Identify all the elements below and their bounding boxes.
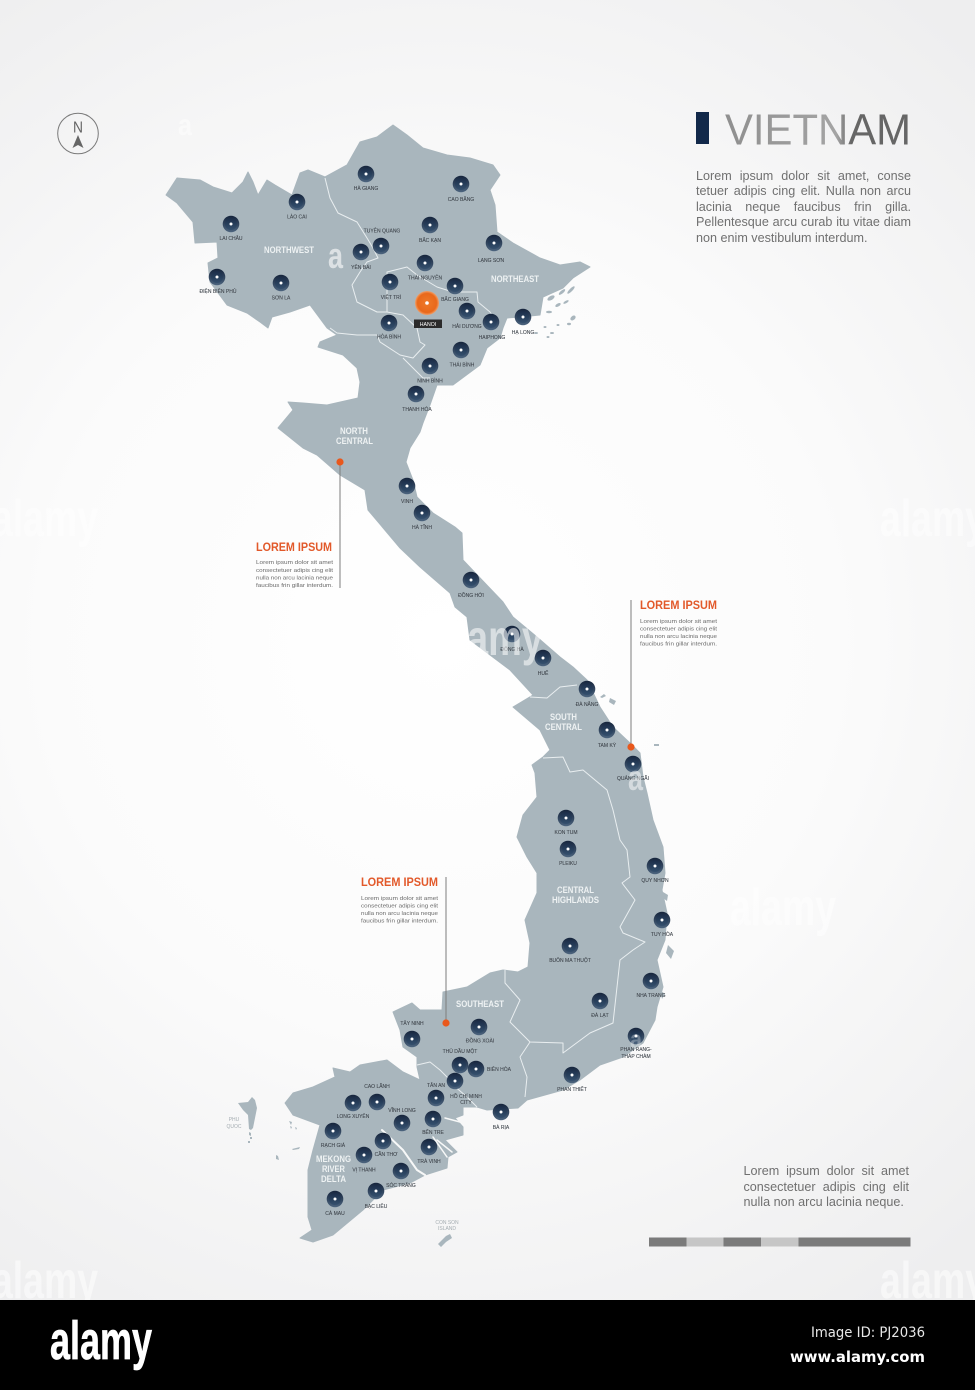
label: Phu Quoc: QUOC bbox=[226, 1124, 242, 1130]
rivers: Mekong mouths bbox=[382, 1118, 460, 1175]
marker: Hanoi capital: HANOI bbox=[420, 322, 436, 328]
marker: Bac Lieu bbox=[365, 1183, 388, 1210]
text block: intro paragraph: Lorem ipsum dolor sit amet, conse bbox=[696, 169, 911, 183]
marker: Tuy Hoa bbox=[651, 912, 674, 938]
callout: South Central: faucibus frin gillar interdum. bbox=[640, 642, 717, 648]
marker: Can Tho: CẦN THƠ bbox=[375, 1151, 398, 1158]
callout: North Central: Lorem ipsum dolor sit amet bbox=[256, 560, 333, 566]
marker: Phan Thiet: PHAN THIẾT bbox=[557, 1086, 587, 1093]
islands: Ha Long bay bbox=[534, 285, 577, 338]
callout: South Central: nulla non arcu lacinia neque bbox=[640, 634, 717, 640]
callout: North Central: LOREM IPSUM bbox=[256, 542, 332, 554]
marker: Bac Lieu: BẠC LIÊU bbox=[365, 1202, 388, 1210]
watermark: alamy stamps: a bbox=[328, 235, 344, 276]
marker: Dong Hoi bbox=[458, 572, 484, 599]
map: Vietnam bbox=[166, 125, 674, 1247]
marker: Rach Gia: RẠCH GIÁ bbox=[321, 1142, 346, 1149]
marker: Bac Kan: BẮC KẠN bbox=[419, 236, 441, 244]
marker: Phan Thiet bbox=[557, 1067, 587, 1093]
islands: central coast bbox=[538, 665, 674, 999]
island: Con Son bbox=[438, 1234, 452, 1247]
marker: Ha Long: HẠ LONG bbox=[512, 330, 534, 336]
marker: Pleiku: PLEIKU bbox=[559, 861, 577, 867]
text block: intro paragraph: non enim vestibulum interdum. bbox=[696, 231, 868, 245]
marker: Yen Bai bbox=[351, 244, 371, 271]
marker: Buon Ma Thuot bbox=[549, 938, 591, 964]
marker: Cao Lanh bbox=[364, 1083, 390, 1110]
callout: South Central: consectetuer adipis cing elit bbox=[640, 626, 717, 632]
marker: Cao Bang bbox=[448, 176, 474, 203]
marker: Thu Dau Mot: THỦ DẦU MỘT bbox=[443, 1048, 477, 1055]
region label: South Central: SOUTH bbox=[550, 712, 577, 722]
marker: Dong Ha: ĐÔNG HÀ bbox=[500, 646, 524, 653]
marker: Ninh Binh bbox=[417, 358, 443, 384]
label: Phu Quoc bbox=[226, 1117, 242, 1130]
marker: Bac Giang: BẮC GIANG bbox=[441, 295, 469, 303]
text block: lower note bbox=[744, 1164, 909, 1209]
marker: Tuyen Quang bbox=[364, 226, 400, 254]
callout: South Central: Lorem ipsum dolor sit amet bbox=[640, 619, 717, 625]
title: Vietnam: VIETNAM bbox=[725, 106, 911, 154]
marker: Soc Trang: SÓC TRĂNG bbox=[386, 1182, 416, 1189]
marker: Tuyen Quang: TUYÊN QUANG bbox=[364, 226, 400, 234]
marker: Ninh Binh: NINH BÌNH bbox=[417, 378, 443, 384]
marker: Ca Mau: CÀ MAU bbox=[325, 1210, 345, 1217]
text block: lower note: Lorem ipsum dolor sit amet bbox=[744, 1164, 909, 1178]
marker: Rach Gia bbox=[321, 1123, 346, 1149]
marker: Ha Tinh bbox=[412, 505, 432, 531]
marker: Buon Ma Thuot: BUÔN MA THUỘT bbox=[549, 957, 591, 964]
watermark: alamy stamps: a bbox=[628, 757, 644, 798]
marker: Dong Xoai bbox=[466, 1019, 494, 1044]
marker: Vinh Long: VĨNH LONG bbox=[388, 1107, 416, 1114]
marker: Tra Vinh: TRÀ VINH bbox=[417, 1158, 441, 1165]
region label: Southeast: SOUTHEAST bbox=[456, 999, 505, 1009]
marker: Da Nang: ĐÀ NẴNG bbox=[576, 701, 599, 708]
region label: South Central bbox=[545, 712, 583, 732]
region label: Mekong River Delta: MEKONG bbox=[316, 1154, 351, 1164]
callout: Southeast: consectetuer adipis cing elit bbox=[361, 904, 438, 910]
text block: intro paragraph bbox=[696, 169, 911, 245]
island: Phu Quoc bbox=[238, 1097, 257, 1130]
footer: alamy bar: Image ID: PJ2036 bbox=[811, 1325, 925, 1341]
region label: Mekong River Delta: DELTA bbox=[321, 1174, 347, 1184]
marker: Ben Tre bbox=[422, 1111, 444, 1136]
marker: Ca Mau bbox=[325, 1191, 345, 1217]
callout: Southeast: nulla non arcu lacinia neque bbox=[361, 911, 438, 917]
marker: Ba Ria bbox=[493, 1104, 510, 1131]
marker: Dong Xoai: ĐỒNG XOÀI bbox=[466, 1038, 494, 1044]
marker: Ba Ria: BÀ RỊA bbox=[493, 1124, 510, 1131]
label: Phu Quoc: PHU bbox=[229, 1117, 240, 1123]
region label: North Central: CENTRAL bbox=[336, 436, 374, 446]
marker: Tam Ky bbox=[598, 722, 617, 749]
text block: intro paragraph: Pellentesque arcu curab itu vitae diam bbox=[696, 215, 911, 229]
marker: Phan Rang-Thap Cham: PHAN RANG- bbox=[620, 1047, 652, 1053]
marker: Vinh bbox=[399, 478, 415, 505]
marker: Ha Giang bbox=[354, 166, 378, 192]
marker: Tay Ninh: TÂY NINH bbox=[400, 1020, 424, 1027]
callout: Southeast: LOREM IPSUM bbox=[361, 877, 438, 889]
marker: Vi Thanh bbox=[352, 1147, 376, 1174]
marker: Tay Ninh bbox=[400, 1020, 424, 1047]
marker: Quy Nhon: QUY NHƠN bbox=[641, 878, 669, 884]
marker: Son La bbox=[272, 275, 291, 302]
region label: Mekong River Delta bbox=[316, 1154, 351, 1184]
marker: Thai Nguyen: THÁI NGUYÊN bbox=[408, 274, 442, 282]
marker: Da Nang bbox=[576, 681, 599, 708]
marker: Pleiku bbox=[559, 841, 577, 867]
region label: Central Highlands: CENTRAL bbox=[557, 885, 595, 895]
label: Con Son Island: ISLAND bbox=[438, 1226, 456, 1232]
callout: South Central: LOREM IPSUM bbox=[640, 600, 717, 612]
scale bar bbox=[649, 1238, 910, 1246]
label: Con Son Island bbox=[435, 1220, 459, 1232]
marker: Lang Son bbox=[478, 235, 505, 264]
regional borders bbox=[325, 178, 645, 1107]
marker: Quy Nhon bbox=[641, 858, 669, 884]
marker: Ha Tinh: HÀ TĨNH bbox=[412, 524, 432, 531]
callout: North Central bbox=[256, 458, 344, 589]
marker: Bac Giang bbox=[441, 278, 469, 303]
text block: lower note: consectetuer adipis cing elit bbox=[744, 1180, 909, 1194]
region label: Northeast: NORTHEAST bbox=[491, 274, 540, 284]
region label: North Central bbox=[336, 426, 374, 446]
marker: Son La: SƠN LA bbox=[272, 296, 291, 302]
callout: Southeast: Lorem ipsum dolor sit amet bbox=[361, 896, 438, 902]
marker: Lao Cai: LÀO CAI bbox=[287, 214, 307, 220]
text block: lower note: nulla non arcu lacinia neque. bbox=[744, 1195, 904, 1209]
marker: Dong Ha bbox=[500, 626, 524, 653]
marker: Da Lat bbox=[591, 993, 609, 1019]
marker: Tan An bbox=[427, 1073, 463, 1089]
marker: Thai Binh: THÁI BÌNH bbox=[450, 362, 475, 368]
marker: Quang Ngai bbox=[617, 756, 649, 782]
compass: north arrow: N bbox=[73, 120, 83, 136]
marker: Kon Tum: KON TUM bbox=[555, 830, 577, 836]
region label: Central Highlands bbox=[552, 885, 599, 905]
footer: alamy bar: alamy bbox=[50, 1311, 152, 1371]
callout: Southeast bbox=[361, 877, 450, 1027]
marker: Dien Bien Phu bbox=[200, 269, 237, 295]
marker: Thu Dau Mot bbox=[443, 1048, 477, 1073]
landmass bbox=[166, 125, 667, 1242]
marker: Tuy Hoa: TUY HÒA bbox=[651, 931, 674, 938]
marker: Vinh: VINH bbox=[401, 499, 413, 505]
marker: Phan Rang-Thap Cham bbox=[620, 1028, 652, 1060]
marker: Long Xuyen bbox=[337, 1095, 370, 1120]
city markers bbox=[200, 166, 674, 1217]
marker: Vinh Long bbox=[388, 1107, 416, 1131]
text block: intro paragraph: lacinia neque faucibus frin gilla. bbox=[696, 200, 911, 214]
marker: Bac Kan bbox=[419, 217, 441, 244]
marker: Can Tho bbox=[375, 1133, 398, 1158]
footer: alamy bar bbox=[0, 1300, 975, 1390]
callout: North Central: consectetuer adipis cing elit bbox=[256, 568, 333, 574]
label: Con Son Island: CON SON bbox=[435, 1220, 459, 1226]
marker: Ben Tre: BẾN TRE bbox=[422, 1129, 444, 1136]
marker: Cao Bang: CAO BẰNG bbox=[448, 195, 474, 203]
marker: Ho Chi Minh City: HỒ CHÍ MINH bbox=[450, 1093, 482, 1100]
marker: Dien Bien Phu: ĐIỆN BIÊN PHỦ bbox=[200, 287, 237, 295]
marker: Haiphong bbox=[479, 314, 505, 341]
marker: Nha Trang bbox=[636, 973, 666, 999]
watermark: alamy stamps: alamy bbox=[730, 879, 836, 937]
region label: Central Highlands: HIGHLANDS bbox=[552, 895, 599, 905]
marker: Kon Tum bbox=[555, 810, 577, 836]
marker: Bien Hoa: BIÊN HÒA bbox=[487, 1065, 512, 1073]
marker: Phan Rang-Thap Cham: THÁP CHÀM bbox=[621, 1053, 651, 1060]
marker: Hue bbox=[535, 650, 551, 677]
region label: Mekong River Delta: RIVER bbox=[322, 1164, 346, 1174]
marker: Lai Chau: LAI CHÂU bbox=[219, 235, 243, 242]
marker: Tan An: TÂN AN bbox=[427, 1082, 445, 1089]
marker: Ha Giang: HÀ GIANG bbox=[354, 185, 378, 192]
marker: Hoa Binh bbox=[377, 315, 401, 340]
marker: Nha Trang: NHA TRANG bbox=[636, 993, 666, 999]
marker: Hue: HUẾ bbox=[538, 670, 549, 677]
watermark: alamy stamps: amy bbox=[467, 610, 543, 666]
marker: Lao Cai bbox=[287, 194, 307, 220]
marker: Long Xuyen: LONG XUYÊN bbox=[337, 1112, 370, 1120]
compass: north arrow bbox=[58, 113, 98, 154]
marker: Tra Vinh bbox=[417, 1139, 441, 1165]
marker: Hanoi capital bbox=[414, 291, 442, 328]
marker: Viet Tri bbox=[381, 274, 402, 301]
marker: Ho Chi Minh City bbox=[428, 1090, 482, 1106]
marker: Da Lat: ĐÀ LẠT bbox=[591, 1012, 609, 1019]
marker: Quang Ngai: QUẢNG NGÃI bbox=[617, 775, 649, 782]
marker: Thai Binh bbox=[450, 342, 475, 368]
region label: Northwest: NORTHWEST bbox=[264, 245, 315, 255]
marker: Vi Thanh: VỊ THANH bbox=[352, 1168, 376, 1174]
marker: Lai Chau bbox=[219, 216, 243, 242]
marker: Bien Hoa bbox=[468, 1061, 512, 1077]
marker: Thai Nguyen bbox=[408, 255, 442, 282]
marker: Thanh Hoa: THANH HÓA bbox=[402, 406, 432, 413]
footer: alamy bar: www.alamy.com bbox=[790, 1348, 925, 1366]
watermark: alamy stamps: a bbox=[630, 1024, 642, 1054]
watermark: alamy stamps: a bbox=[178, 109, 192, 142]
marker: Hoa Binh: HÒA BÌNH bbox=[377, 334, 401, 340]
marker: Haiphong: HAIPHONG bbox=[479, 335, 505, 341]
marker: Soc Trang bbox=[386, 1163, 416, 1189]
callout: North Central: faucibus frin gillar interdum. bbox=[256, 583, 333, 589]
marker: Dong Hoi: ĐỒNG HỚI bbox=[458, 592, 484, 599]
region label: South Central: CENTRAL bbox=[545, 722, 583, 732]
marker: Yen Bai: YÊN BÁI bbox=[351, 263, 371, 271]
marker: Thanh Hoa bbox=[402, 386, 432, 413]
text block: intro paragraph: tetuer adipis cing elit. Nulla non arcu bbox=[696, 184, 911, 198]
marker: Viet Tri: VIỆT TRÌ bbox=[381, 293, 402, 301]
marker: Hai Duong: HẢI DƯƠNG bbox=[452, 323, 482, 330]
region label: North Central: NORTH bbox=[340, 426, 368, 436]
callout: North Central: nulla non arcu lacinia neque bbox=[256, 576, 333, 582]
marker: Ha Long bbox=[512, 309, 534, 336]
marker: Tam Ky: TAM KỲ bbox=[598, 742, 617, 749]
marker: Cao Lanh: CAO LÃNH bbox=[364, 1083, 390, 1090]
callout: Southeast: faucibus frin gillar interdum. bbox=[361, 918, 438, 924]
marker: Lang Son: LẠNG SƠN bbox=[478, 258, 505, 264]
callout: South Central bbox=[627, 600, 717, 751]
marker: Hai Duong bbox=[452, 303, 482, 330]
marker: Ho Chi Minh City: CITY bbox=[460, 1100, 472, 1106]
